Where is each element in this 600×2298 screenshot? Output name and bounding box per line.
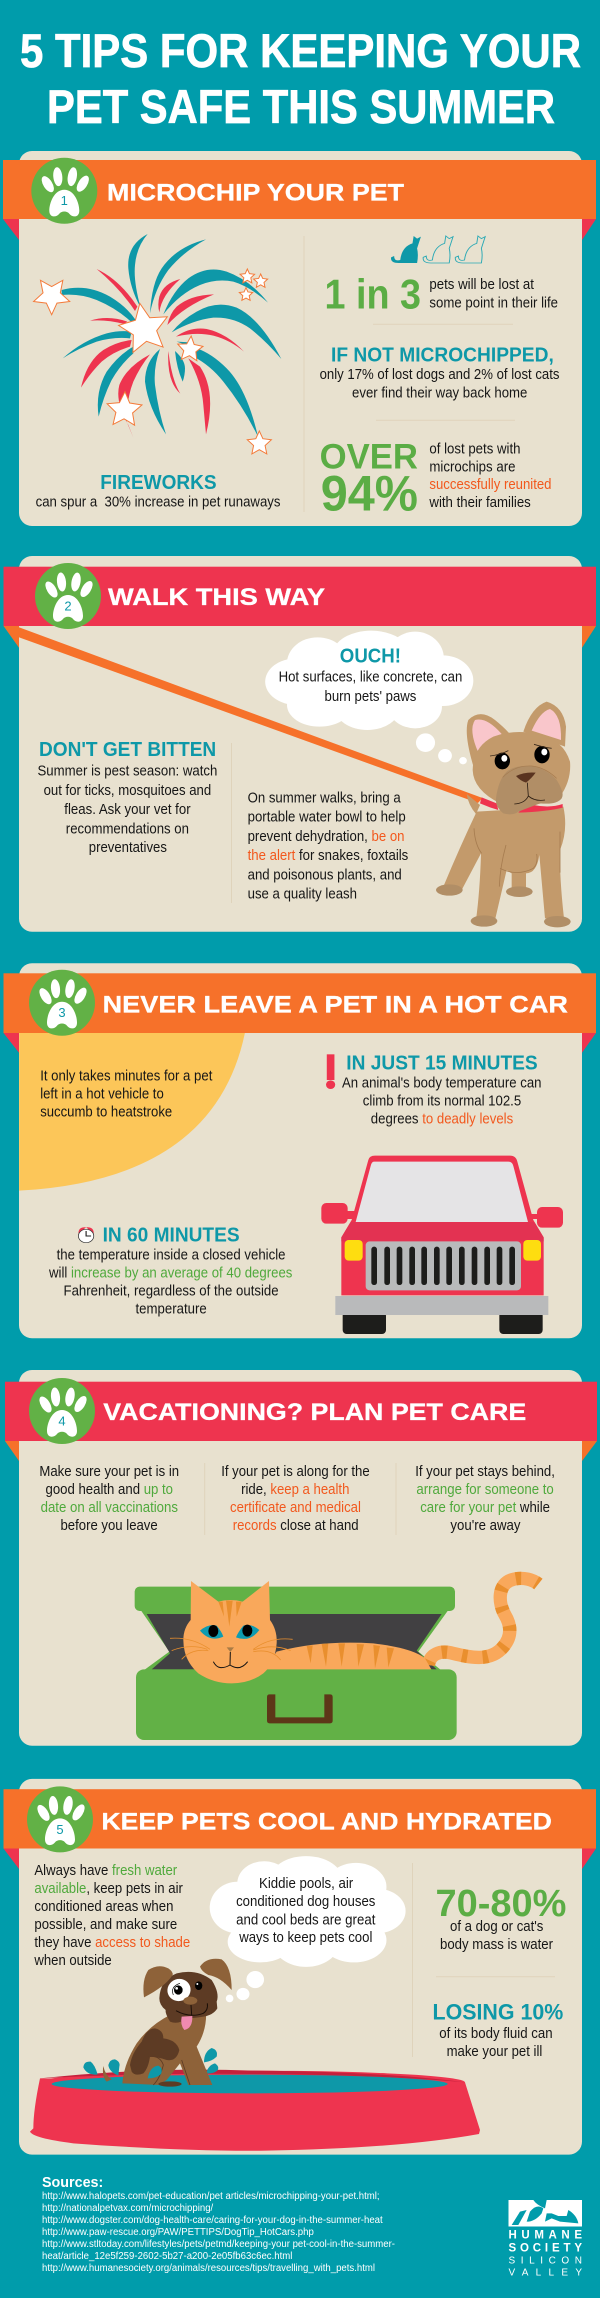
sources list: heat/article_12e5f259-2602-5b27-a200-2e05fb63c6ec.html [42, 2251, 292, 2262]
icon: alarm clock [78, 1227, 94, 1243]
text column: care: care for your pet while [420, 1500, 550, 1516]
sun shape [19, 1033, 245, 1191]
fireworks caption: can spur a 30% increase in pet runaways [36, 495, 280, 511]
text: in 60 minutes: IN 60 MINUTES [103, 1224, 240, 1246]
text column: care: you're away [450, 1518, 521, 1534]
text: don't get bitten: recommendations on [66, 821, 189, 837]
text: don't get bitten: DON'T GET BITTEN [39, 739, 216, 761]
stat: over 94%: 94% [321, 466, 418, 522]
stat: 1 in 3: pets will be lost at [429, 277, 534, 293]
panel background [19, 1779, 582, 2155]
sources list: http://www.stltoday.com/lifestyles/pets/petmd/keeping-your pet-cool-in-the-summer- [42, 2239, 395, 2250]
text: summer walks: prevent dehydration, be on [248, 829, 404, 845]
text: heatstroke: left in a hot vehicle to [40, 1087, 164, 1103]
thought bubble: kiddie pools: conditioned dog houses [236, 1894, 375, 1910]
text: fresh water: available, keep pets in air [34, 1881, 183, 1897]
text: don't get bitten: Summer is pest season: watch [38, 764, 217, 780]
text: in just 15 minutes [342, 1052, 542, 1127]
illustration: dog on leash [436, 702, 571, 927]
stat: 70-80%: 70-80% [436, 1883, 566, 1925]
icon: numbered paw 4: 4 [58, 1414, 66, 1428]
thought bubble: ouch: OUCH! [340, 646, 401, 668]
text: in just 15 minutes: climb from its normal 102.5 [363, 1093, 521, 1109]
leash [17, 627, 483, 803]
text: summer walks: portable water bowl to help [248, 810, 406, 826]
icon: three cats [391, 236, 485, 263]
stat: if not microchipped [320, 345, 560, 401]
banner ribbon [5, 1382, 597, 1461]
text: don't get bitten: fleas. Ask your vet for [64, 802, 191, 818]
text column: health: date on all vaccinations [41, 1500, 178, 1516]
text: fresh water: Always have fresh water [34, 1863, 177, 1879]
panel: vacationing [5, 1370, 597, 1746]
logo: humane society silicon valley: VALLEY [508, 2267, 582, 2278]
thought bubble: kiddie pools: ways to keep pets cool [238, 1930, 372, 1946]
heading: walk this way: WALK THIS WAY [108, 584, 325, 611]
text: don't get bitten: out for ticks, mosquitoes and [44, 783, 211, 799]
panel background [19, 151, 582, 526]
stat: over 94%: microchips are [429, 459, 516, 475]
text column: care: arrange for someone to [416, 1482, 554, 1498]
stat: if not microchipped: only 17% of lost dogs and 2% of lost cats [320, 367, 560, 383]
icon: numbered paw 3: 3 [58, 1005, 66, 1020]
heading: keep pets cool: KEEP PETS COOL AND HYDRATED [101, 1808, 552, 1835]
heading: never leave a pet: NEVER LEAVE A PET IN A HOT CAR [103, 991, 568, 1018]
text column: health: good health and up to [46, 1482, 173, 1498]
logo: humane society silicon valley: HUMANE [508, 2230, 582, 2242]
text column: records [221, 1464, 370, 1534]
heading: vacationing: VACATIONING? PLAN PET CARE [103, 1399, 526, 1426]
text: don't get bitten [38, 739, 217, 856]
fireworks caption [36, 472, 280, 511]
stat: losing 10%: of its body fluid can [439, 2026, 553, 2042]
text column: health: Make sure your pet is in [39, 1464, 179, 1480]
sources list [42, 2174, 395, 2274]
illustration: red car [321, 1156, 563, 1334]
text: summer walks: use a quality leash [248, 887, 357, 903]
panel: never leave a pet in a hot car [4, 963, 596, 1338]
sources list: http://www.humanesociety.org/animals/resources/tips/travelling_with_pets.html [42, 2263, 375, 2274]
text: fresh water: conditioned areas when [34, 1899, 173, 1915]
sources list: http://www.halopets.com/pet-education/pet articles/microchipping-your-pet.html; [42, 2191, 380, 2202]
text: in 60 minutes: the temperature inside a closed vehicle [57, 1247, 285, 1263]
thought bubble: ouch: Hot surfaces, like concrete, can [279, 670, 462, 686]
text: heatstroke [40, 1069, 212, 1121]
panel: walk this way [4, 556, 596, 932]
text: in just 15 minutes: degrees to deadly levels [371, 1111, 513, 1127]
text column: care [415, 1464, 555, 1534]
icon: numbered paw 5 [27, 1786, 93, 1852]
text: fresh water [33, 1863, 190, 1969]
illustration: bowl with water [30, 2070, 480, 2151]
stat: 70-80% [436, 1883, 566, 1953]
panel: microchip your pet [3, 151, 596, 526]
stat: over 94%: OVER [320, 437, 418, 476]
sources list: http://www.paw-rescue.org/PAW/PETTIPS/DogTip_HotCars.php [42, 2227, 314, 2238]
text: in 60 minutes: temperature [136, 1301, 207, 1317]
heading: microchip your pet: MICROCHIP YOUR PET [107, 180, 404, 206]
icon: exclamation mark [326, 1054, 335, 1089]
stat: over 94%: of lost pets with [429, 441, 520, 457]
icon: numbered paw 4 [29, 1378, 95, 1444]
stat: losing 10%: LOSING 10% [432, 2000, 563, 2025]
text: don't get bitten: preventatives [89, 840, 167, 856]
stat: 70-80%: of a dog or cat's [450, 1919, 543, 1935]
logo: humane society silicon valley: SILICON [508, 2255, 582, 2266]
text column: care: If your pet stays behind, [415, 1464, 555, 1480]
icon: numbered paw 3 [29, 970, 95, 1036]
stat: 1 in 3: some point in their life [429, 295, 558, 311]
text: in just 15 minutes: IN JUST 15 MINUTES [346, 1052, 538, 1074]
stat: if not microchipped: IF NOT MICROCHIPPED, [331, 345, 554, 367]
text: fresh water: they have access to shade [34, 1935, 190, 1951]
logo: humane society silicon valley [508, 2200, 582, 2278]
logo: humane society silicon valley: SOCIETY [508, 2242, 582, 2254]
text: summer walks: On summer walks, bring a [248, 791, 402, 807]
text: in 60 minutes [48, 1224, 292, 1317]
banner ribbon [4, 1789, 596, 1869]
icon: numbered paw 2: 2 [64, 598, 72, 614]
banner ribbon [3, 160, 596, 240]
thought bubble: ouch [265, 631, 473, 764]
sources list: http://nationalpetvax.com/microchipping/ [42, 2203, 213, 2214]
stat: 1 in 3: 1 in 3 [324, 270, 421, 317]
thought bubble: kiddie pools [210, 1856, 406, 2002]
text: summer walks: and poisonous plants, and [248, 867, 402, 883]
text: fresh water: when outside [33, 1953, 112, 1969]
icon: numbered paw 2 [35, 563, 101, 629]
illustration: cat in suitcase [135, 1578, 538, 1740]
icon: numbered paw 1 [31, 158, 97, 224]
stat: losing 10%: make your pet ill [447, 2044, 542, 2060]
title [20, 24, 581, 133]
stat: 70-80%: body mass is water [440, 1937, 553, 1953]
text: in 60 minutes: Fahrenheit, regardless of the outside [64, 1283, 279, 1299]
text column: records: If your pet is along for the [221, 1464, 370, 1480]
text column: records: records close at hand [233, 1518, 359, 1534]
icon: numbered paw 1: 1 [61, 193, 68, 208]
fireworks illustration [34, 234, 281, 454]
text: summer walks: the alert for snakes, foxtails [248, 848, 408, 864]
text column: records: ride, keep a health [241, 1482, 349, 1498]
text: heatstroke: succumb to heatstroke [40, 1105, 172, 1121]
illustration: brown dog [83, 1959, 232, 2087]
panel background [19, 963, 582, 1338]
text column: health: before you leave [60, 1518, 158, 1534]
stat: if not microchipped: ever find their way back home [352, 385, 527, 401]
panel background [19, 1370, 582, 1746]
stat: losing 10% [432, 2000, 563, 2060]
text: in 60 minutes: will increase by an average of 40 degrees [48, 1265, 292, 1281]
icon: numbered paw 5: 5 [56, 1822, 64, 1837]
text: summer walks [248, 791, 408, 903]
fireworks caption: FIREWORKS [100, 472, 217, 494]
banner ribbon [4, 973, 596, 1053]
sources list: Sources: [42, 2174, 103, 2191]
thought bubble: kiddie pools: and cool beds are great [236, 1912, 375, 1928]
panel background [19, 556, 582, 932]
text: fresh water: possible, and make sure [34, 1917, 177, 1933]
text column: records: certificate and medical [230, 1500, 361, 1516]
stat: over 94%: with their families [428, 495, 531, 511]
stat: over 94% [320, 437, 552, 522]
text: heatstroke: It only takes minutes for a pet [40, 1069, 212, 1085]
sources list: http://www.dogster.com/dog-health-care/caring-for-your-dog-in-the-summer-heat [42, 2215, 383, 2226]
thought bubble: kiddie pools: Kiddie pools, air [259, 1876, 353, 1892]
stat: 1 in 3 [324, 270, 558, 317]
stat: over 94%: successfully reunited [429, 477, 552, 493]
panel: keep pets cool [4, 1779, 596, 2155]
text column: health [39, 1464, 179, 1534]
thought bubble: ouch: burn pets' paws [324, 689, 416, 705]
text: in just 15 minutes: An animal's body temperature can [342, 1075, 542, 1091]
banner ribbon [4, 567, 596, 648]
